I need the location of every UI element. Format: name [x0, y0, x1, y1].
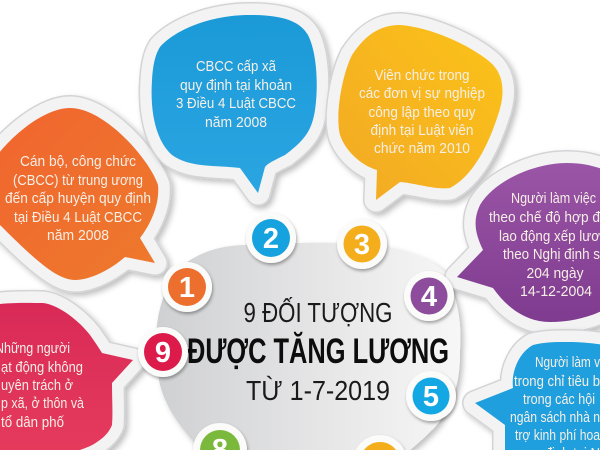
badge 2 [246, 213, 296, 263]
bubble 4: purple: 14-12-2004 [520, 283, 592, 300]
badge 5 [406, 371, 456, 421]
bubble 3: yellow: chức năm 2010 [374, 140, 470, 157]
bubble 2: blue: năm 2008 [205, 114, 267, 131]
bubble 3: yellow: định tại Luật viên [370, 122, 474, 139]
badge 1 [162, 262, 212, 312]
bubble 5: light blue [475, 342, 600, 450]
bubble 1: orange: năm 2008 [47, 227, 109, 244]
badge 1: 1 [179, 272, 195, 304]
title line 3: TỪ 1-7-2019 [246, 375, 390, 406]
bubble 9: red: tổ dân phố [1, 414, 65, 431]
bubble 1: orange: đến cấp huyện quy định [5, 190, 151, 207]
bubble 9: red: ạt động không [1, 359, 83, 376]
bubble 4: purple [457, 163, 600, 322]
bubble 1: orange: (CBCC) từ trung ương [13, 172, 143, 189]
bubble 4: purple: 204 ngày [526, 265, 584, 282]
central grey blob [156, 243, 460, 450]
bubble 2: blue: quy định tại khoản [180, 77, 292, 94]
bubble 3: yellow: công lập theo quy [368, 104, 476, 121]
bubble 2: blue: CBCC cấp xã [196, 58, 277, 75]
badge 3: 3 [354, 229, 370, 261]
bubble 9: red [0, 303, 133, 450]
bubble 3: yellow: Viên chức trong [374, 67, 470, 84]
badge 3 [337, 219, 387, 269]
bubble 9: red: p xã, ở thôn và [1, 395, 85, 412]
badge 9 [138, 327, 188, 377]
badge 4: 4 [421, 281, 437, 313]
badge 4 [404, 271, 454, 321]
bubble 3: yellow: các đơn vị sự nghiệp [359, 85, 485, 102]
bubble 1: orange: tại Điều 4 Luật CBCC [14, 209, 142, 226]
title line 2: ĐƯỢC TĂNG LƯƠNG [187, 332, 449, 371]
bubble 3: yellow [338, 25, 503, 200]
title [187, 296, 449, 406]
badge 7 [356, 435, 404, 450]
badge 5: 5 [423, 381, 439, 413]
title line 1: 9 ĐỐI TƯỢNG [244, 296, 392, 328]
bubble 1: orange: Cán bộ, công chức [20, 153, 136, 170]
badge 9: 9 [155, 337, 171, 369]
bubble 9: red: uyên trách ở [1, 377, 73, 394]
bubble 2: blue: 3 Điều 4 Luật CBCC [176, 95, 296, 112]
bubble 1: orange [0, 108, 158, 280]
bubble 2: blue [152, 15, 317, 193]
badge 2: 2 [263, 223, 279, 255]
badge 8 [193, 423, 247, 450]
